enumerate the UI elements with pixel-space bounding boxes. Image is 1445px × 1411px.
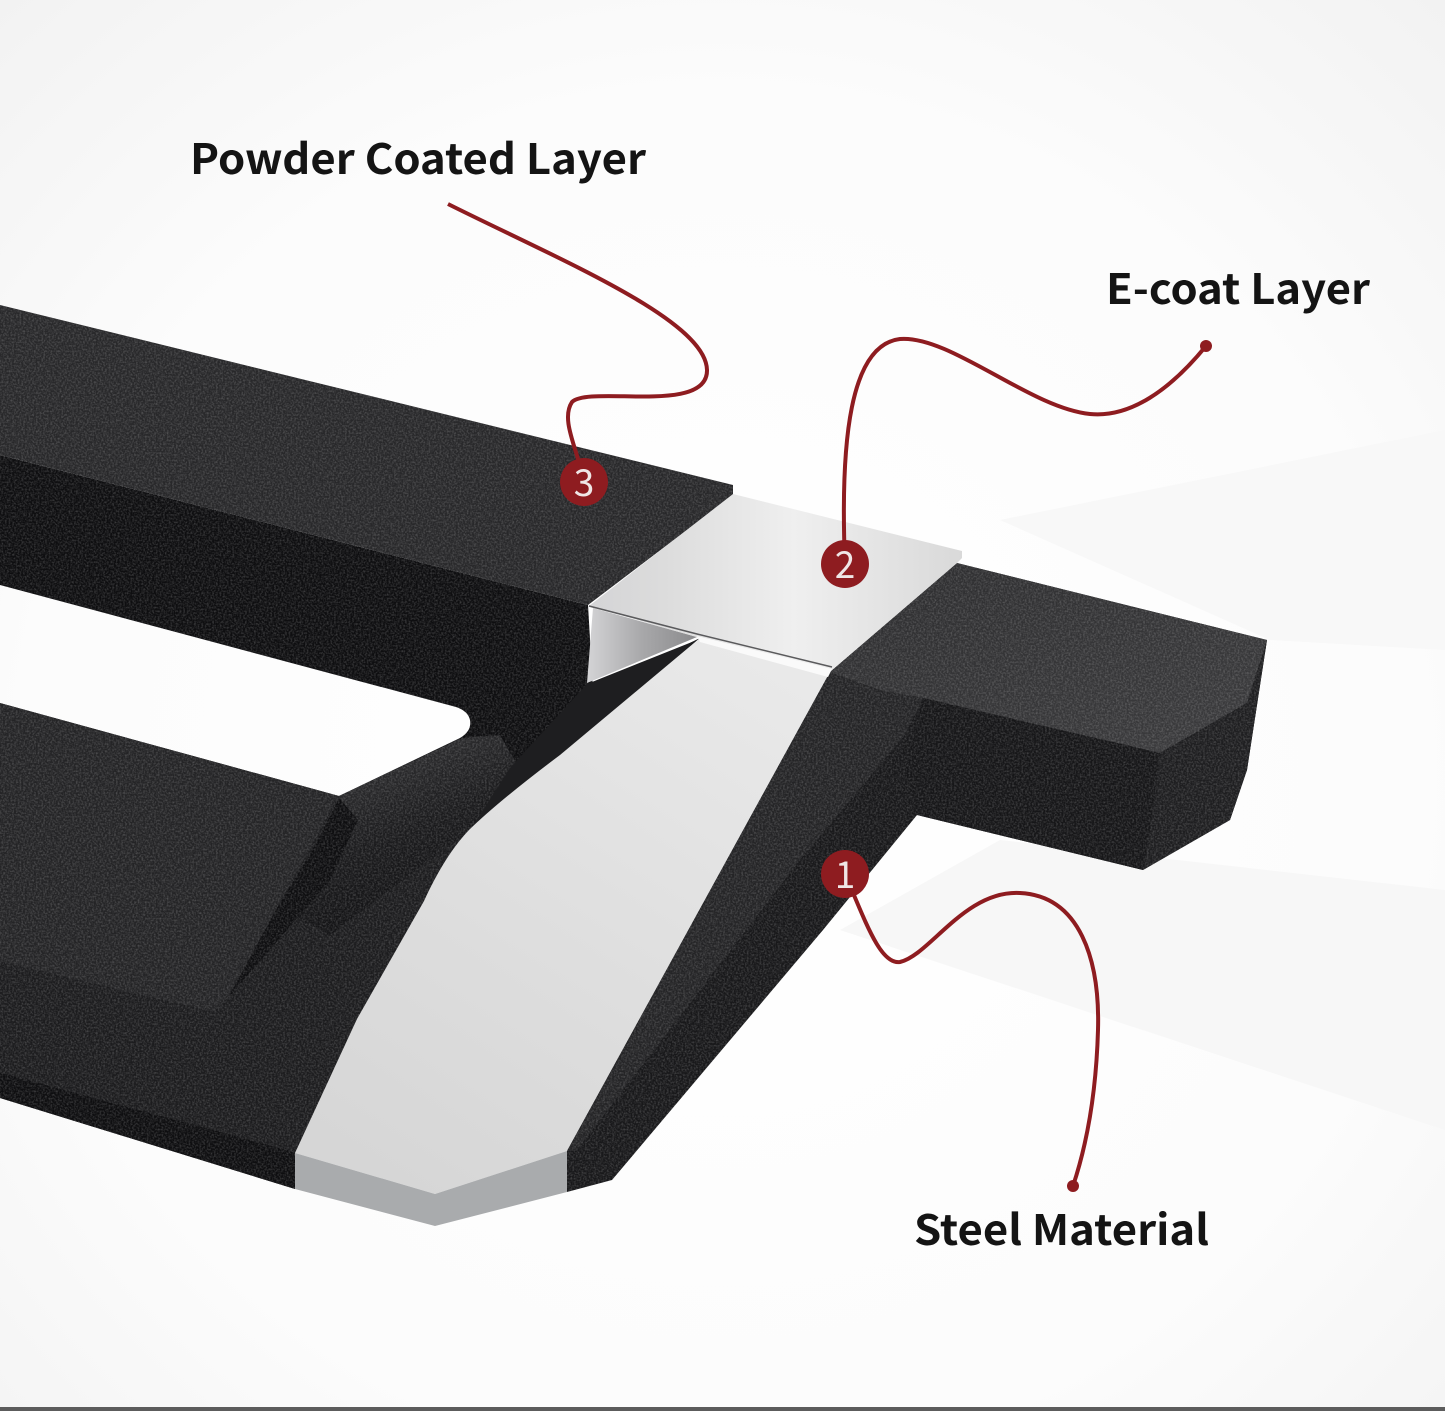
label: steel material: Steel Material (914, 1197, 1209, 1258)
number 2: 2 (835, 535, 855, 589)
sheen panel (277, 735, 520, 935)
callout: e-coat layer (821, 256, 1371, 589)
silver end band (295, 1151, 567, 1226)
lower inner panel (0, 703, 339, 1012)
number 3: 3 (574, 453, 594, 507)
arm side lit (567, 672, 923, 1151)
leader line 1 (845, 874, 1098, 1186)
leader line 2 (844, 339, 1206, 564)
lower outer panel (0, 830, 469, 1153)
chrome upper plate (589, 494, 962, 670)
running board product (0, 305, 1267, 1226)
black support arm (567, 563, 1267, 1192)
label: powder coated layer: Powder Coated Layer (190, 126, 647, 187)
label: e-coat layer: E-coat Layer (1106, 256, 1371, 317)
upper front and connecting wall (0, 455, 700, 1189)
arm base (567, 563, 1267, 1192)
callout: powder coated layer (190, 126, 707, 507)
chrome seam line (589, 606, 832, 667)
chrome triangle (587, 608, 697, 683)
bottom band (0, 1073, 295, 1189)
crease shadow (228, 798, 358, 998)
marker 3 (560, 458, 608, 506)
callout: steel material (821, 845, 1209, 1258)
leader line 3 (448, 204, 707, 482)
powder coated top surface (0, 305, 733, 605)
marker 1 (821, 850, 869, 898)
left black body (0, 305, 733, 1189)
chrome highlight (697, 636, 832, 677)
step front (905, 698, 1160, 870)
marker 2 (821, 540, 869, 588)
step top (830, 563, 1267, 753)
end dot (1067, 1180, 1079, 1192)
number 1: 1 (835, 845, 855, 899)
dark channel beside chrome (469, 640, 697, 832)
silver diagonal strip (295, 638, 830, 1194)
step right face (1143, 640, 1267, 870)
end dot (1200, 340, 1212, 352)
